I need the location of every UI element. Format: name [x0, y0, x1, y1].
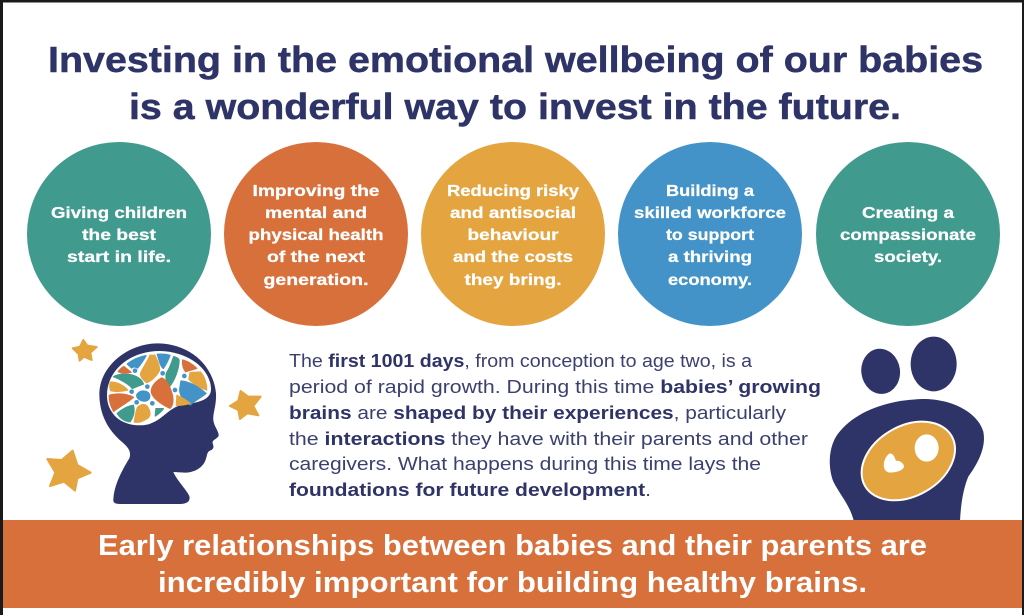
baby heart: [884, 453, 904, 473]
circle: improving health: physical health: [248, 227, 384, 244]
title: [48, 39, 983, 127]
text block: first 1001 days: The first 1001 days , from conception to age two, is a: [289, 351, 753, 371]
parent head large: [911, 337, 957, 391]
icon: brain: [107, 351, 211, 425]
banner: [3, 520, 1022, 608]
circle: skilled workforce: [618, 142, 802, 326]
circle: improving health: [224, 142, 408, 326]
circle: skilled workforce: Building a: [666, 183, 754, 200]
icon: parents and baby: [830, 337, 984, 522]
body: [830, 399, 984, 522]
baby head: [915, 434, 939, 462]
circle: reducing risky behaviour: behaviour: [468, 227, 558, 244]
circle: reducing risky behaviour: and antisocial: [450, 205, 576, 222]
circle: reducing risky behaviour: they bring.: [464, 272, 562, 289]
circle: skilled workforce: to support: [666, 227, 754, 244]
circle: reducing risky behaviour: and the costs: [453, 249, 573, 266]
icon: stars: [47, 340, 261, 491]
circle: compassionate society: society.: [874, 249, 942, 266]
icon: child head silhouette: [99, 343, 219, 504]
banner: Early relationships between babies and their parents are: [98, 530, 927, 562]
circle: improving health: Improving the: [252, 183, 380, 200]
text block: first 1001 days: [289, 351, 821, 500]
text block: first 1001 days: caregivers. What happens during this time lays the: [289, 454, 761, 474]
title: is a wonderful way to invest in the future.: [129, 86, 901, 127]
text block: first 1001 days: period of rapid growth. During this time babies’ growing: [289, 377, 821, 397]
text block: first 1001 days: brains are shaped by their experiences , particularly: [289, 403, 786, 423]
circle: giving children: [27, 142, 211, 326]
banner: incredibly important for building healthy brains.: [158, 567, 867, 599]
circle: compassionate society: Creating a: [862, 205, 954, 222]
title: Investing in the emotional wellbeing of our babies: [48, 39, 983, 80]
circle: compassionate society: [816, 142, 1000, 326]
circle: reducing risky behaviour: [421, 142, 605, 326]
circle: compassionate society: compassionate: [840, 227, 976, 244]
circle: giving children: the best: [82, 227, 156, 244]
parent head small: [858, 346, 903, 396]
text block: first 1001 days: foundations for future development .: [289, 480, 651, 500]
circle: skilled workforce: skilled workforce: [634, 205, 786, 222]
circle: giving children: Giving children: [51, 205, 187, 222]
circle: improving health: of the next: [267, 249, 365, 266]
circle: giving children: start in life.: [67, 249, 171, 266]
circle: skilled workforce: a thriving: [668, 249, 752, 266]
circle: improving health: generation.: [264, 272, 368, 289]
text block: first 1001 days: the interactions they have with their parents and other: [289, 429, 808, 449]
circle: skilled workforce: economy.: [668, 272, 752, 289]
circle: improving health: mental and: [265, 205, 367, 222]
womb: [848, 406, 969, 516]
circle: reducing risky behaviour: Reducing risky: [447, 183, 579, 200]
